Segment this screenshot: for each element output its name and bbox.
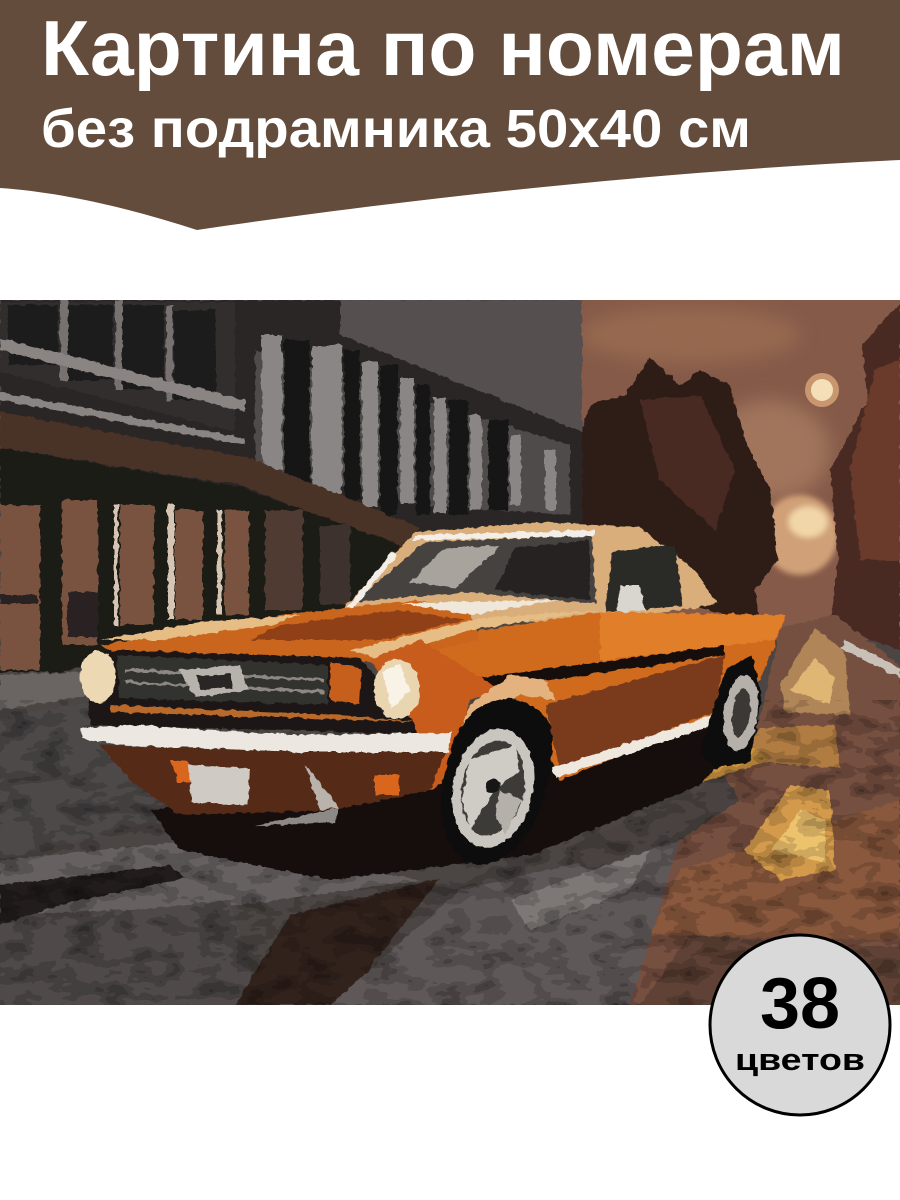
colour count badge — [710, 935, 890, 1115]
front fascia and grille — [88, 650, 417, 734]
pavement left — [0, 672, 90, 710]
trees — [565, 303, 900, 650]
licence plate — [188, 765, 250, 805]
painting: orange car on evening street — [0, 300, 900, 1005]
header banner — [0, 0, 900, 230]
subtitle: без подрамника 50х40 см — [41, 99, 751, 159]
title: Картина по номерам — [41, 4, 845, 92]
badge label: цветов — [735, 1042, 865, 1077]
front wheel — [441, 699, 552, 865]
car shadow — [150, 720, 760, 880]
chrome bumper — [80, 725, 452, 752]
windshield — [355, 535, 596, 604]
road mottling texture — [0, 700, 900, 1005]
headlights — [80, 651, 116, 703]
wet road and sidewalk — [0, 615, 900, 1005]
side window — [605, 545, 683, 612]
rear wheel — [700, 655, 763, 768]
car — [80, 522, 786, 826]
number of colours: 38 — [760, 964, 840, 1044]
front lower fender — [370, 640, 500, 790]
sky with sun — [575, 300, 900, 640]
building — [0, 300, 582, 672]
car roof and pillars — [340, 522, 718, 622]
lower valance — [100, 745, 445, 815]
hood — [100, 600, 480, 662]
car body side — [420, 612, 786, 780]
